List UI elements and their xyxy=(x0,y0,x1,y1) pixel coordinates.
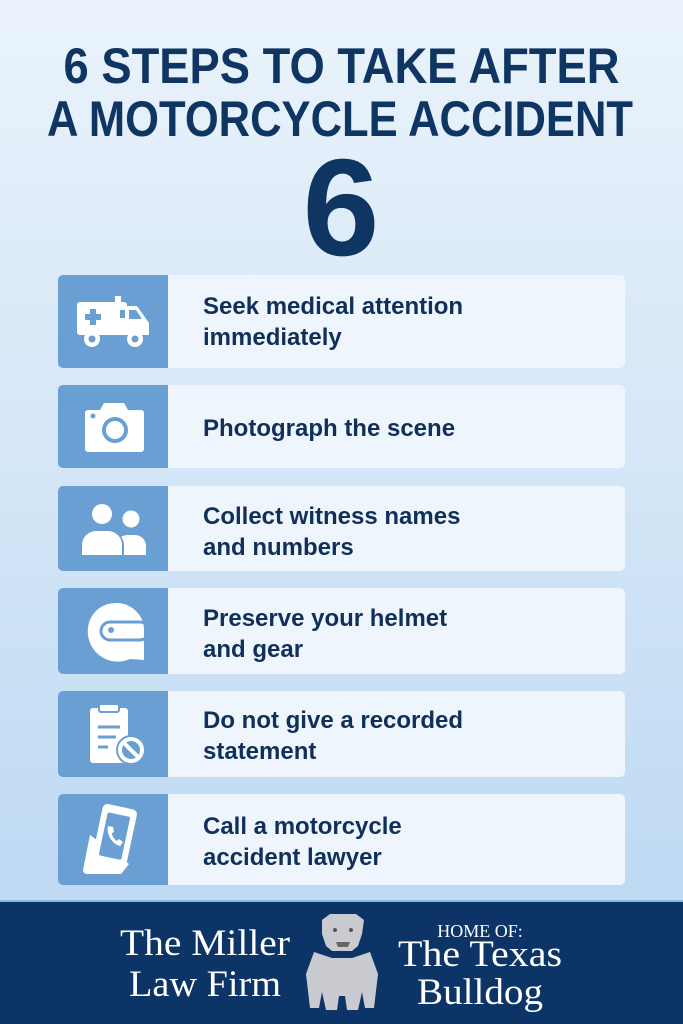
icon: people xyxy=(82,504,146,555)
icon: helmet xyxy=(88,603,149,662)
step 3: and numbers xyxy=(203,534,354,561)
step 2 xyxy=(58,385,625,468)
step 3 xyxy=(58,486,625,571)
footer: firm name xyxy=(120,923,290,1005)
text: step 6: Call a motorcycle xyxy=(203,813,402,840)
icon: clipboard with no sign xyxy=(90,704,146,765)
footer xyxy=(0,900,683,1024)
step 6 xyxy=(58,794,625,885)
text: step 1: Seek medical attention xyxy=(203,293,463,320)
footer: Bulldog xyxy=(417,972,543,1013)
icon: phone in hand xyxy=(83,803,138,874)
icon: ambulance xyxy=(77,296,149,347)
step 5 xyxy=(58,691,625,777)
icon: camera xyxy=(85,403,144,452)
step 4 xyxy=(58,588,625,674)
big number 6: 6 xyxy=(303,131,379,285)
step 1: immediately xyxy=(203,324,342,351)
footer: firm name: The Miller xyxy=(120,923,290,964)
footer: The Texas xyxy=(398,934,562,975)
step 5: statement xyxy=(203,738,316,765)
title: 6 STEPS TO TAKE AFTER xyxy=(64,38,620,94)
footer: firm name: Law Firm xyxy=(129,964,281,1005)
step 4: and gear xyxy=(203,636,303,663)
icon: bulldog xyxy=(306,914,378,1010)
footer: home of: HOME OF: xyxy=(437,921,523,941)
text: step 4: Preserve your helmet xyxy=(203,605,447,632)
step 6: accident lawyer xyxy=(203,844,382,871)
text: step 5: Do not give a recorded xyxy=(203,707,463,734)
text: step 2: Photograph the scene xyxy=(203,415,455,442)
title xyxy=(47,38,633,147)
text: step 3: Collect witness names xyxy=(203,503,460,530)
step 1 xyxy=(58,275,625,368)
